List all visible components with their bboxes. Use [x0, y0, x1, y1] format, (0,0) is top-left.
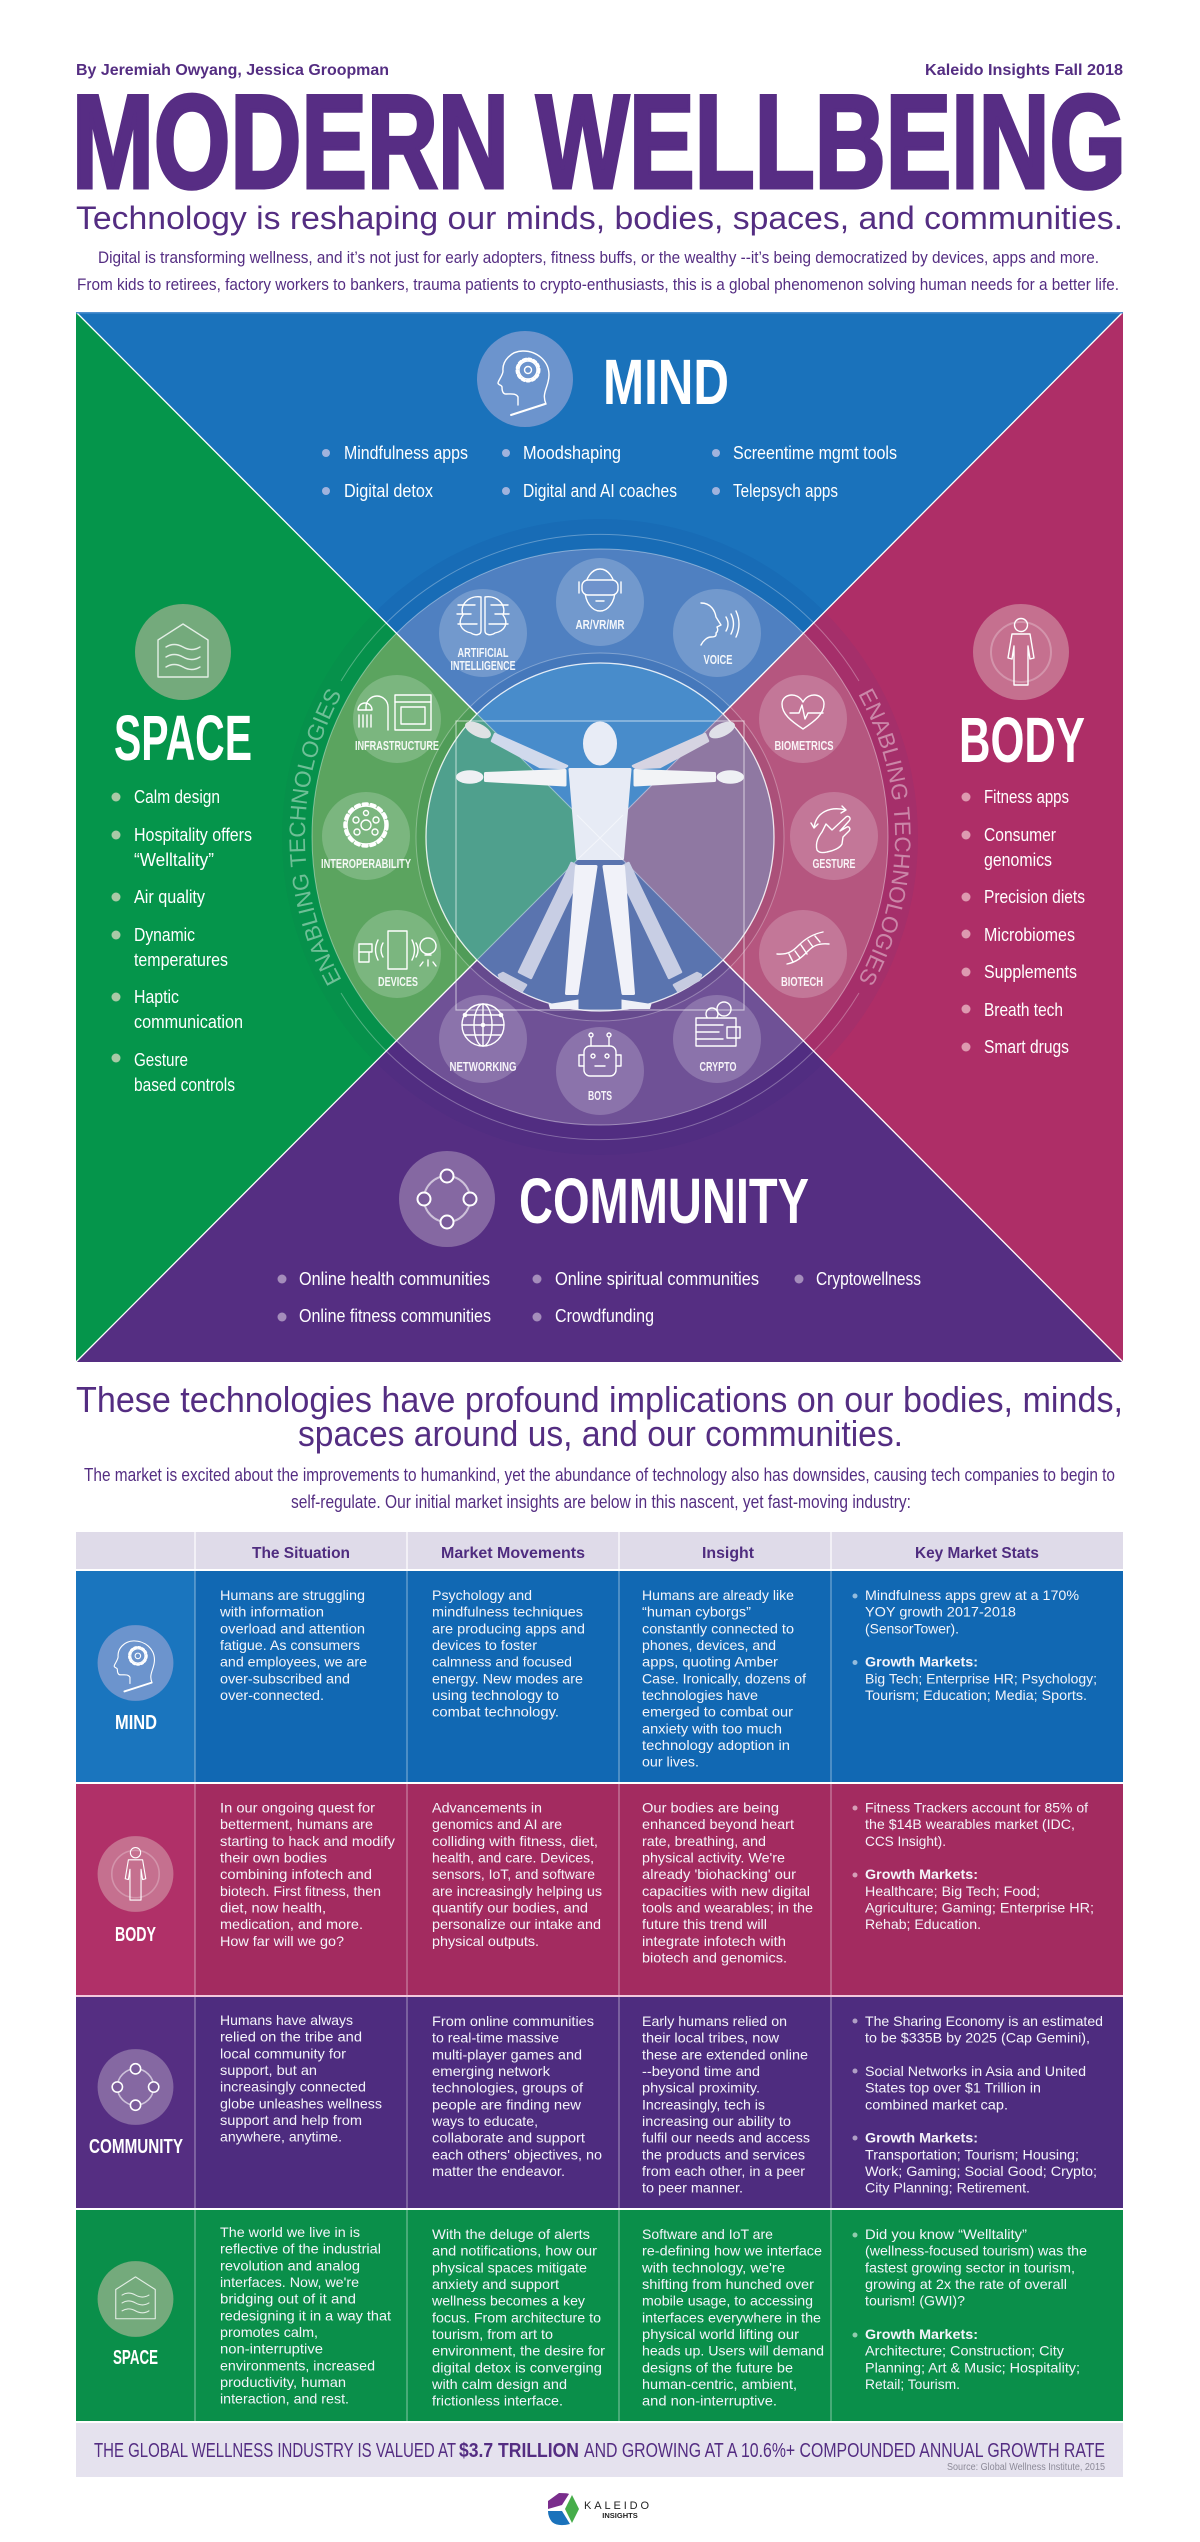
cell: mind insight: apps, quoting Amber: [642, 1654, 778, 1670]
section paragraph: self-regulate. Our initial market insights are below in this nascent, yet fast-moving industry:: [291, 1492, 911, 1512]
table row: mind: [76, 1571, 1123, 1782]
list: space topics: Air quality: [134, 887, 205, 907]
cell: mind situation: overload and attention: [220, 1620, 365, 1636]
tech: artificial intelligence: INTELLIGENCE: [450, 659, 516, 673]
cell: body situation: medication, and more.: [220, 1916, 363, 1932]
diagram background: four quadrants with concentric rings: [76, 312, 1123, 1362]
cell: body market movements: quantify our bodies, and: [432, 1900, 588, 1916]
list: community topics: Online spiritual communities: [555, 1269, 759, 1289]
cell: space key stats: tourism! (GWI)?: [865, 2293, 965, 2309]
row icon: space: [98, 2261, 173, 2337]
cell: community market movements: technologies, groups of: [432, 2080, 583, 2096]
cell: body situation: betterment, humans are: [220, 1816, 373, 1832]
cell: body insight: biotech and genomics.: [642, 1950, 787, 1966]
cell: community insight: Early humans relied on: [642, 2013, 787, 2029]
cell: community insight: increasing our ability to: [642, 2113, 791, 2129]
tech: voice: VOICE: [704, 653, 732, 667]
cell: community situation: [220, 2012, 382, 2145]
cell: community market movements: people are finding new: [432, 2096, 582, 2112]
cell: mind market movements: using technology to: [432, 1687, 559, 1703]
cell: community insight: --beyond time and: [642, 2063, 760, 2079]
cell: space insight: human-centric, ambient,: [642, 2376, 797, 2392]
cell: space situation: productivity, human: [220, 2374, 346, 2390]
icon: body person: [973, 604, 1069, 700]
cell: mind insight: Humans are already like: [642, 1587, 794, 1603]
table header row: Key Market Stats: [915, 1545, 1039, 1562]
cell: space situation: redesigning it in a way that: [220, 2307, 391, 2323]
cell: space market movements: physical spaces mitigate: [432, 2259, 587, 2275]
cell: mind insight: our lives.: [642, 1754, 699, 1770]
cell: body situation: diet, now health,: [220, 1900, 326, 1916]
cell: space key stats: growing at 2x the rate of overall: [865, 2276, 1067, 2292]
cell: body key stats: CCS Insight).: [865, 1833, 946, 1849]
list: mind topics: Screentime mgmt tools: [733, 443, 897, 463]
list: space topics: based controls: [134, 1075, 235, 1095]
list: space topics: “Welltality”: [134, 850, 214, 870]
cell: space situation: interaction, and rest.: [220, 2391, 349, 2407]
figure: head, torso, arms and legs: [456, 722, 744, 1009]
tech: gesture: GESTURE: [812, 857, 856, 871]
cell: space insight: physical world lifting our: [642, 2326, 799, 2342]
cell: body insight: tools and wearables; in the: [642, 1900, 813, 1916]
cell: space situation: environments, increased: [220, 2357, 375, 2373]
cell: community insight: Increasingly, tech is: [642, 2096, 765, 2112]
logo: Kaleido Insights: INSIGHTS: [602, 2511, 638, 2520]
cell: space key stats: Did you know “Welltality”: [865, 2226, 1027, 2242]
tech: AR/VR/MR: [556, 558, 644, 646]
cell: mind key stats: Mindfulness apps grew at a 170%: [865, 1587, 1079, 1603]
icon: space house with waves: [135, 604, 231, 700]
cell: body market movements: colliding with fitness, diet,: [432, 1833, 598, 1849]
cell: body situation: combining infotech and: [220, 1866, 372, 1882]
cell: community situation: support and help from: [220, 2112, 362, 2128]
cell: mind key stats: (SensorTower).: [865, 1620, 959, 1636]
cell: mind market movements: are producing apps and: [432, 1620, 585, 1636]
tech: interoperability: INTEROPERABILITY: [321, 857, 411, 871]
cell: space insight: heads up. Users will demand: [642, 2343, 824, 2359]
cell: body key stats: Rehab; Education.: [865, 1916, 981, 1932]
cell: mind insight: emerged to combat our: [642, 1704, 793, 1720]
cell: community key stats: States top over $1 Trillion in: [865, 2080, 1041, 2096]
tech: crypto: [673, 995, 761, 1083]
cell: community key stats: Transportation; Tourism; Housing;: [865, 2146, 1079, 2162]
icon: mind head with gear: [477, 331, 573, 427]
cell: space situation: non-interruptive: [220, 2341, 323, 2357]
cell: space market movements: tourism, from art to: [432, 2326, 553, 2342]
curved label: enabling technologies left: ENABLING TECHNOLOGIES: [289, 689, 341, 986]
table header row: Insight: [702, 1545, 755, 1562]
section heading: implications: These technologies have profound implications on our bodies, minds,: [76, 1379, 1123, 1420]
intro paragraph: [77, 248, 1119, 294]
cell: community insight: the products and services: [642, 2146, 805, 2162]
tech: biometrics: BIOMETRICS: [774, 739, 834, 753]
cell: mind insight: “human cyborgs”: [642, 1604, 751, 1620]
table row: body: [76, 1784, 1123, 1996]
cell: community situation: relied on the tribe and: [220, 2029, 362, 2045]
tech: biotech: BIOTECH: [781, 975, 823, 989]
cell: space insight: shifting from hunched over: [642, 2276, 814, 2292]
cell: space market movements: [431, 2226, 605, 2409]
cell: space situation: bridging out of it and: [220, 2291, 356, 2307]
cell: community situation: local community for: [220, 2045, 346, 2061]
cell: community insight: fulfil our needs and access: [642, 2130, 810, 2146]
cell: community key stats: City Planning; Retirement.: [865, 2180, 1030, 2196]
cell: community situation: anywhere, anytime.: [220, 2129, 342, 2145]
cell: mind situation: with information: [219, 1604, 324, 1620]
row label: space: SPACE: [113, 2347, 158, 2369]
cell: body situation: [220, 1800, 395, 1949]
cell: space market movements: wellness becomes a key: [431, 2293, 585, 2309]
table header row: The Situation: [252, 1545, 350, 1562]
cell: community market movements: multi-player games and: [432, 2046, 582, 2062]
cell: body situation: starting to hack and modify: [220, 1833, 395, 1849]
list: community topics: Online health communities: [299, 1269, 490, 1289]
tech: crypto: CRYPTO: [700, 1060, 737, 1074]
row label: community: COMMUNITY: [89, 2136, 183, 2158]
tech: infrastructure: INFRASTRUCTURE: [355, 739, 439, 753]
cell: mind insight: technology adoption in: [642, 1737, 790, 1753]
cell: body situation: biotech. First fitness, then: [220, 1883, 381, 1899]
list: space topics: temperatures: [134, 950, 228, 970]
cell: space market movements: and notifications, how our: [432, 2243, 597, 2259]
cell: mind insight: technologies have: [642, 1687, 758, 1703]
list: space topics: Gesture: [134, 1050, 188, 1070]
cell: community situation: increasingly connected: [220, 2079, 366, 2095]
cell: body insight: physical activity. We're: [642, 1850, 785, 1866]
cell: space market movements: focus. From architecture to: [432, 2309, 601, 2325]
tech: gesture: [790, 792, 878, 880]
list: mind topics: [322, 443, 897, 501]
cell: community key stats: [852, 2013, 1103, 2196]
cell: body insight: Our bodies are being: [642, 1800, 779, 1816]
list: body topics: Smart drugs: [984, 1037, 1069, 1057]
cell: space insight: interfaces everywhere in the: [642, 2309, 821, 2325]
tech: biotech: [759, 910, 847, 998]
cell: space insight: and non-interruptive.: [642, 2393, 777, 2409]
cell: body key stats: Healthcare; Big Tech; Food;: [865, 1883, 1040, 1899]
tech: AR/VR/MR: AR/VR/MR: [576, 618, 624, 632]
list: mind topics: Digital detox: [344, 481, 433, 501]
cell: community market movements: to real-time massive: [432, 2030, 559, 2046]
tech: devices: DEVICES: [378, 975, 418, 989]
cell: mind situation: [219, 1587, 367, 1703]
cell: space situation: The world we live in is: [220, 2224, 360, 2240]
cell: community situation: Humans have always: [220, 2012, 353, 2028]
cell: community key stats: to be $335B by 2025 (Cap Gemini),: [865, 2030, 1090, 2046]
cell: space insight: Software and IoT are: [642, 2226, 773, 2242]
figure: raised arms and spread legs: [463, 718, 737, 991]
cell: body market movements: genomics and AI are: [432, 1816, 562, 1832]
cell: body key stats: the $14B wearables market (IDC,: [865, 1816, 1075, 1832]
section heading: implications: spaces around us, and our communities.: [298, 1413, 903, 1454]
cell: community market movements: From online communities: [432, 2013, 594, 2029]
list: community topics: Crowdfunding: [555, 1306, 654, 1326]
list: community topics: Cryptowellness: [816, 1269, 921, 1289]
list: space topics: communication: [134, 1012, 243, 1032]
footer band: global wellness statistic: $3.7 TRILLION: [459, 2440, 579, 2462]
tech: interoperability: [321, 792, 411, 880]
cell: space insight: [641, 2226, 824, 2409]
cell: mind market movements: mindfulness techniques: [432, 1604, 583, 1620]
list: body topics: Consumer: [984, 825, 1056, 845]
cell: community market movements: each others' objectives, no: [432, 2146, 602, 2162]
panel: community heading and list: [278, 1151, 921, 1326]
list: mind topics: Telepsych apps: [733, 481, 838, 501]
cell: space market movements: digital detox is converging: [432, 2359, 602, 2375]
cell: community insight: [642, 2013, 810, 2196]
cell: space situation: reflective of the industrial: [220, 2241, 381, 2257]
cell: mind situation: fatigue. As consumers: [220, 1637, 360, 1653]
tech: networking: NETWORKING: [450, 1060, 516, 1074]
cell: space key stats: Planning; Art & Music; Hospitality;: [865, 2359, 1080, 2375]
heading: mind: MIND: [603, 346, 729, 418]
list: mind topics: Moodshaping: [523, 443, 621, 463]
logo: Kaleido Insights: [548, 2493, 652, 2525]
curved label: enabling technologies right: ENABLING TECHNOLOGIES: [858, 688, 911, 985]
cell: space market movements: with calm design and: [431, 2376, 567, 2392]
list: mind topics: Mindfulness apps: [344, 443, 468, 463]
list: space topics: Haptic: [134, 987, 179, 1007]
intro paragraph: Digital is transforming wellness, and it’s not just for early adopters, fitness buffs, or the wealthy --it’s being democratized by devices, apps and more.: [98, 248, 1099, 267]
section heading: implications: [76, 1379, 1123, 1454]
list: body topics: Precision diets: [984, 887, 1085, 907]
list: body topics: [962, 787, 1085, 1057]
central human figure in square: [456, 718, 744, 1010]
heading: space: SPACE: [114, 702, 252, 774]
cell: space situation: revolution and analog: [220, 2257, 360, 2273]
cell: space key stats: Retail; Tourism.: [865, 2376, 960, 2392]
cell: community key stats: The Sharing Economy is an estimated: [865, 2013, 1103, 2029]
panel: body heading and list: [959, 604, 1085, 1057]
tech: bots: BOTS: [588, 1089, 612, 1103]
cell: space insight: mobile usage, to accessing: [642, 2293, 813, 2309]
list: body topics: Fitness apps: [984, 787, 1069, 807]
heading: community: COMMUNITY: [519, 1165, 809, 1237]
footer band: global wellness statistic: THE GLOBAL WELLNESS INDUSTRY IS VALUED AT: [94, 2440, 456, 2462]
cell: community insight: their local tribes, now: [642, 2030, 780, 2046]
cell: body situation: their own bodies: [220, 1850, 327, 1866]
cell: mind key stats: [852, 1587, 1097, 1703]
cell: mind market movements: devices to foster: [432, 1637, 537, 1653]
row label: body: BODY: [115, 1924, 156, 1946]
list: body topics: genomics: [984, 850, 1052, 870]
intro paragraph: From kids to retirees, factory workers to bankers, trauma patients to crypto-enthusiasts, this is a global phenomenon solving human needs for a better life.: [77, 275, 1119, 294]
byline: publisher and date: Kaleido Insights Fall 2018: [925, 62, 1123, 79]
cell: mind situation: over-connected.: [220, 1687, 324, 1703]
heading: body: BODY: [959, 704, 1085, 776]
cell: body insight: integrate infotech with: [642, 1933, 786, 1949]
cell: body market movements: are increasingly helping us: [432, 1883, 602, 1899]
cell: community market movements: matter the endeavor.: [432, 2163, 565, 2179]
cell: mind insight: phones, devices, and: [642, 1637, 776, 1653]
footer band: global wellness statistic: [76, 2423, 1123, 2477]
cell: mind situation: and employees, we are: [220, 1654, 367, 1670]
cell: space situation: promotes calm,: [220, 2324, 318, 2340]
cell: body market movements: physical outputs.: [432, 1933, 539, 1949]
footer band: global wellness statistic: Source: Global Wellness Institute, 2015: [947, 2462, 1105, 2473]
cell: body insight: capacities with new digital: [642, 1883, 810, 1899]
subtitle: Technology is reshaping our minds, bodies, spaces, and communities.: [76, 200, 1123, 236]
cell: space situation: [220, 2224, 391, 2407]
cell: space insight: designs of the future be: [642, 2359, 793, 2375]
cell: body key stats: Growth Markets:: [865, 1866, 978, 1882]
icon: community ring of nodes: [399, 1151, 495, 1247]
cell: mind market movements: energy. New modes are: [432, 1670, 583, 1686]
table row: community: [76, 1997, 1123, 2208]
cell: mind key stats: Growth Markets:: [865, 1654, 978, 1670]
list: body topics: Microbiomes: [984, 925, 1075, 945]
cell: community key stats: combined market cap.: [865, 2096, 1008, 2112]
cell: body market movements: sensors, IoT, and software: [432, 1866, 595, 1882]
cell: body key stats: [852, 1800, 1094, 1932]
panel: space heading and list: [112, 604, 252, 1095]
list: space topics: Dynamic: [134, 925, 195, 945]
tech: biometrics: [759, 675, 847, 763]
cell: community insight: these are extended online: [642, 2046, 808, 2062]
cell: space situation: interfaces. Now, we're: [220, 2274, 359, 2290]
cell: mind market movements: combat technology.: [432, 1704, 559, 1720]
row icon: mind: [98, 1625, 173, 1701]
cell: mind situation: over-subscribed and: [220, 1670, 350, 1686]
table header row: [76, 1532, 1123, 1569]
cell: mind insight: [642, 1587, 806, 1770]
cell: body market movements: Advancements in: [432, 1800, 542, 1816]
byline: authors: By Jeremiah Owyang, Jessica Groopman: [76, 62, 389, 79]
list: mind topics: Digital and AI coaches: [523, 481, 677, 501]
cell: mind key stats: Big Tech; Enterprise HR; Psychology;: [865, 1670, 1097, 1686]
cell: space market movements: frictionless interface.: [432, 2393, 563, 2409]
tech: artificial intelligence: ARTIFICIAL: [458, 646, 509, 660]
cell: community key stats: Work; Gaming; Social Good; Crypto;: [865, 2163, 1097, 2179]
cell: community key stats: Social Networks in Asia and United: [865, 2063, 1086, 2079]
list: space topics: Hospitality offers: [134, 825, 252, 845]
row icon: community: [98, 2049, 173, 2125]
cell: space market movements: With the deluge of alerts: [432, 2226, 590, 2242]
cell: community market movements: [431, 2013, 602, 2179]
logo: Kaleido Insights: KALEIDO: [584, 2500, 652, 2512]
cell: space key stats: (wellness-focused tourism) was the: [865, 2243, 1087, 2259]
cell: space key stats: Growth Markets:: [865, 2326, 978, 2342]
cell: mind insight: constantly connected to: [642, 1620, 794, 1636]
cell: space insight: with technology, we're: [641, 2259, 785, 2275]
cell: body insight: already 'biohacking' our: [642, 1866, 796, 1882]
list: body topics: Supplements: [984, 962, 1077, 982]
tech: voice: [673, 589, 761, 677]
cell: mind insight: Case. Ironically, dozens of: [642, 1670, 806, 1686]
cell: space key stats: Architecture; Construction; City: [865, 2343, 1064, 2359]
cell: body key stats: Agriculture; Gaming; Enterprise HR;: [865, 1900, 1094, 1916]
section paragraph: [84, 1465, 1115, 1512]
cell: mind key stats: YOY growth 2017-2018: [865, 1604, 1016, 1620]
cell: body market movements: health, and care. Devices,: [432, 1850, 594, 1866]
cell: mind market movements: calmness and focused: [432, 1654, 572, 1670]
cell: community insight: physical proximity.: [642, 2080, 760, 2096]
cell: mind market movements: [432, 1587, 585, 1720]
cell: community key stats: Growth Markets:: [865, 2130, 978, 2146]
tech: devices: [353, 910, 441, 998]
list: space topics: [112, 787, 252, 1095]
list: space topics: Calm design: [134, 787, 220, 807]
cell: community situation: globe unleashes wellness: [220, 2095, 382, 2111]
row icon: body: [98, 1836, 173, 1912]
table row: space: [76, 2210, 1123, 2421]
list: community topics: [278, 1269, 921, 1326]
cell: space market movements: environment, the desire for: [432, 2343, 605, 2359]
tech: bots: [556, 1027, 644, 1115]
cell: space key stats: [852, 2226, 1087, 2392]
tech: networking: [439, 995, 527, 1083]
cell: body insight: [642, 1800, 813, 1966]
cell: mind insight: anxiety with too much: [642, 1720, 782, 1736]
cell: body insight: enhanced beyond heart: [642, 1816, 794, 1832]
cell: body market movements: personalize our intake and: [432, 1916, 601, 1932]
cell: community market movements: collaborate and support: [432, 2130, 585, 2146]
enabling technology circles: [321, 558, 878, 1115]
panel: mind heading and list: [322, 331, 897, 501]
cell: mind situation: Humans are struggling: [220, 1587, 365, 1603]
cell: community situation: support, but an: [220, 2062, 317, 2078]
table header row: Market Movements: [441, 1545, 585, 1562]
cell: body situation: How far will we go?: [220, 1933, 344, 1949]
cell: body market movements: [432, 1800, 602, 1949]
list: community topics: Online fitness communities: [299, 1306, 491, 1326]
cell: space key stats: fastest growing sector in tourism,: [865, 2259, 1075, 2275]
cell: space insight: re-defining how we interface: [642, 2243, 822, 2259]
tech: infrastructure: [353, 675, 441, 763]
cell: space market movements: anxiety and support: [432, 2276, 559, 2292]
cell: community market movements: emerging network: [432, 2063, 551, 2079]
tech: artificial intelligence: [439, 589, 527, 677]
cell: body key stats: Fitness Trackers account for 85% of: [865, 1800, 1088, 1816]
cell: mind key stats: Tourism; Education; Media; Sports.: [865, 1687, 1087, 1703]
cell: mind market movements: Psychology and: [432, 1587, 532, 1603]
cell: community insight: to peer manner.: [642, 2180, 743, 2196]
cell: body situation: In our ongoing quest for: [220, 1800, 375, 1816]
cell: body insight: future this trend will: [642, 1916, 767, 1932]
cell: body insight: rate, breathing, and: [642, 1833, 766, 1849]
list: body topics: Breath tech: [984, 1000, 1063, 1020]
row label: mind: MIND: [115, 1712, 157, 1734]
cell: community market movements: ways to educate,: [431, 2113, 538, 2129]
cell: community insight: from each other, in a peer: [642, 2163, 805, 2179]
